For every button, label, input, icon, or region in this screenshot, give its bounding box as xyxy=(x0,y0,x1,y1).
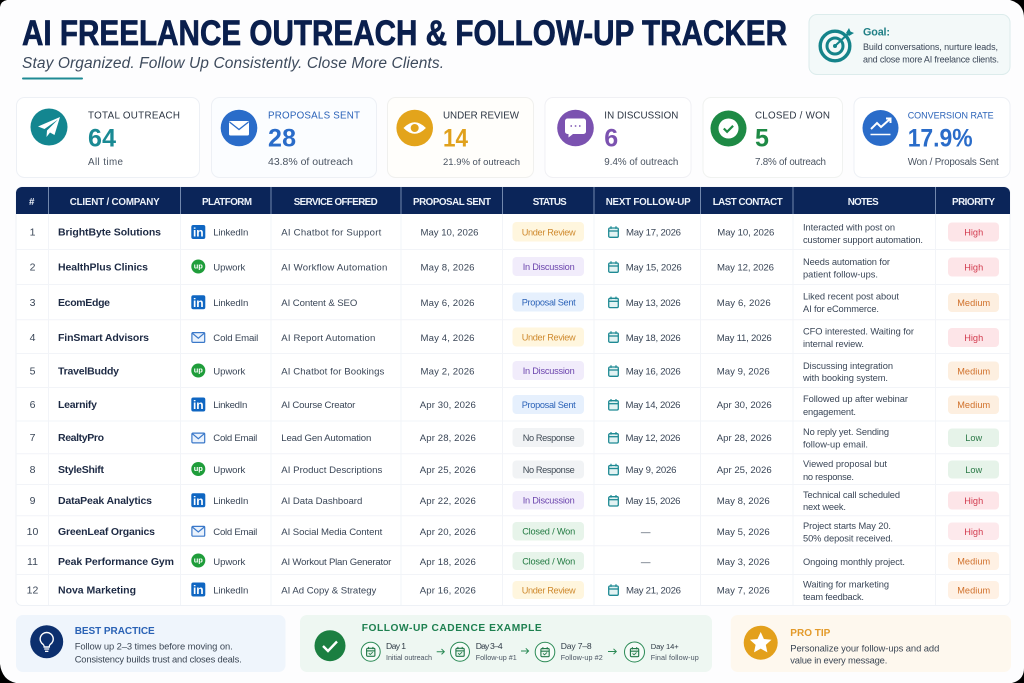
icon: star xyxy=(744,626,778,660)
KPI: closed won xyxy=(703,98,842,178)
note xyxy=(803,580,889,602)
icon: target xyxy=(820,28,854,61)
note: Waiting for marketing xyxy=(803,580,889,590)
note xyxy=(803,521,893,544)
note xyxy=(802,361,893,383)
icon: trend line xyxy=(862,110,898,146)
note: No reply yet. Sending xyxy=(803,427,889,437)
KPI: in discussion: IN DISCUSSION xyxy=(604,110,678,122)
row 10: AI Social Media Content xyxy=(281,527,383,538)
row 12: AI Ad Copy & Strategy xyxy=(281,586,377,596)
KPI: closed won: 7.8% of outreach xyxy=(755,157,826,168)
KPI: closed won: CLOSED / WON xyxy=(755,110,830,122)
row 5: AI Chatbot for Bookings xyxy=(281,366,385,378)
platform: LinkedIn xyxy=(191,295,248,310)
row 11: AI Workout Plan Generator xyxy=(281,557,392,568)
status: Under Review xyxy=(512,328,584,346)
priority: Medium xyxy=(948,581,999,599)
priority: High xyxy=(948,258,999,276)
platform: Upwork: up xyxy=(194,464,203,473)
priority: High xyxy=(948,222,999,242)
note: Project starts May 20. xyxy=(803,521,891,531)
subtitle: Stay Organized. Follow Up Consistently. Close More Clients. xyxy=(22,55,444,72)
priority: Medium xyxy=(948,293,999,312)
status: Closed / Won: Closed / Won xyxy=(522,526,575,536)
panel: pro tip xyxy=(731,615,1011,672)
row 2: 2 xyxy=(30,262,36,274)
row 12: May 7, 2026 xyxy=(717,586,770,596)
next follow-up xyxy=(609,464,676,476)
note: AI for eCommerce. xyxy=(803,304,879,314)
panel: best practice: Follow up 2–3 times before moving on. xyxy=(75,640,233,652)
KPI: under review: 21.9% of outreach xyxy=(443,157,520,168)
note: follow-up email. xyxy=(803,440,868,450)
priority: High: High xyxy=(964,527,983,537)
status: Closed / Won xyxy=(512,522,584,540)
row 9: May 8, 2026 xyxy=(717,496,770,507)
priority: High: High xyxy=(964,496,983,506)
row 4: AI Report Automation xyxy=(281,333,375,344)
platform: LinkedIn: in xyxy=(193,398,204,412)
table header xyxy=(16,187,1010,214)
step: day 7-8 xyxy=(535,641,603,662)
status: In Discussion: In Discussion xyxy=(523,496,575,506)
KPI: total outreach: 64 xyxy=(88,125,116,153)
row 11: 11 xyxy=(27,556,38,568)
row 7: 7 xyxy=(30,432,36,444)
panel: best practice xyxy=(16,615,286,672)
row 7: RealtyPro xyxy=(58,432,104,444)
note: customer support automation. xyxy=(803,235,923,245)
KPI: total outreach: TOTAL OUTREACH xyxy=(88,110,180,122)
priority: Low xyxy=(948,428,999,447)
platform: Upwork: up xyxy=(194,262,203,271)
status: In Discussion xyxy=(512,361,584,380)
priority: Medium xyxy=(948,396,999,414)
KPI: closed won: 5 xyxy=(755,125,769,153)
status: Proposal Sent xyxy=(512,292,584,312)
panel: best practice: Consistency builds trust and closes deals. xyxy=(75,654,242,664)
KPI: conversion rate: CONVERSION RATE xyxy=(908,110,994,120)
next follow-up: May 9, 2026 xyxy=(626,465,676,476)
priority: Low xyxy=(948,460,999,478)
row 11 xyxy=(27,552,999,570)
platform: LinkedIn: in xyxy=(193,296,204,310)
platform: Upwork: up xyxy=(194,556,203,565)
panel: follow-up cadence xyxy=(300,615,712,672)
table header: SERVICE OFFERED xyxy=(294,197,378,208)
table header: PLATFORM xyxy=(202,197,252,208)
platform: Cold Email: Cold Email xyxy=(213,527,257,538)
table header: LAST CONTACT xyxy=(713,197,783,208)
step: day 14+: Day 14+ xyxy=(651,642,679,651)
row 8 xyxy=(30,459,999,482)
next follow-up: May 13, 2026 xyxy=(626,298,681,309)
row 10: May 5, 2026 xyxy=(717,527,770,538)
priority: High: High xyxy=(964,227,983,237)
row 5: May 9, 2026 xyxy=(717,366,770,378)
row 8: Apr 25, 2026 xyxy=(420,465,476,476)
row 1: May 10, 2026 xyxy=(420,228,478,238)
platform: Cold Email: Cold Email xyxy=(213,433,257,444)
status: Proposal Sent xyxy=(512,395,584,414)
note: Viewed proposal but xyxy=(803,459,887,469)
step: day 3-4 xyxy=(450,641,517,662)
next follow-up xyxy=(609,432,680,444)
row 11: Apr 18, 2026 xyxy=(420,557,476,568)
icon: paper plane xyxy=(30,108,68,146)
row 5 xyxy=(30,361,999,383)
row 4: May 4, 2026 xyxy=(420,333,474,344)
panel: pro tip: Personalize your follow-ups and add xyxy=(790,642,939,654)
next follow-up: May 12, 2026 xyxy=(626,433,680,444)
priority: High: High xyxy=(964,262,983,272)
next follow-up xyxy=(609,226,681,238)
row 12 xyxy=(27,580,999,602)
row 8: StyleShift xyxy=(58,464,104,476)
platform: Cold Email: Cold Email xyxy=(213,333,258,344)
table header: CLIENT / COMPANY xyxy=(70,197,160,208)
arrow xyxy=(521,648,529,654)
note xyxy=(803,292,899,314)
arrow xyxy=(608,649,616,654)
row 1: 1 xyxy=(30,226,36,238)
table xyxy=(16,187,1010,606)
note: with booking system. xyxy=(802,373,888,383)
note xyxy=(803,222,923,245)
row 4: May 11, 2026 xyxy=(717,333,772,344)
row 7: Apr 28, 2026 xyxy=(717,433,772,444)
note xyxy=(803,490,900,512)
next follow-up xyxy=(609,297,681,309)
table header: STATUS xyxy=(533,197,567,208)
platform: Upwork: Upwork xyxy=(213,262,246,274)
row 7: Apr 28, 2026 xyxy=(420,433,476,444)
next follow-up: none: — xyxy=(641,527,651,538)
icon: chat bubble xyxy=(557,110,594,146)
row 7 xyxy=(30,427,999,450)
row 7: Lead Gen Automation xyxy=(281,433,371,444)
status: In Discussion xyxy=(512,257,584,276)
step: day 7-8: Day 7–8 xyxy=(561,641,592,651)
platform: Cold Email xyxy=(192,433,257,444)
platform: LinkedIn: LinkedIn xyxy=(213,586,248,596)
row 3: AI Content & SEO xyxy=(281,298,357,309)
row 3: May 6, 2026 xyxy=(420,298,474,309)
icon: envelope xyxy=(221,110,257,146)
row 6: Apr 30, 2026 xyxy=(420,400,476,411)
goal callout xyxy=(809,14,1010,74)
note: CFO interested. Waiting for xyxy=(803,326,914,336)
KPI: under review: UNDER REVIEW xyxy=(443,110,520,122)
status: Under Review xyxy=(512,581,584,599)
next follow-up: May 18, 2026 xyxy=(626,333,681,344)
step: day 1 xyxy=(361,641,432,662)
row 2 xyxy=(30,257,999,280)
row 5: May 2, 2026 xyxy=(420,366,474,378)
priority: Medium xyxy=(948,362,999,380)
note: patient follow-ups. xyxy=(803,270,878,280)
row 9: AI Data Dashboard xyxy=(281,496,362,507)
icon: eye xyxy=(396,110,433,146)
priority: Medium: Medium xyxy=(957,366,991,376)
note: Technical call scheduled xyxy=(803,490,900,500)
row 6: AI Course Creator xyxy=(281,400,356,411)
row 9: DataPeak Analytics xyxy=(58,495,152,507)
status: In Discussion: In Discussion xyxy=(523,366,575,376)
note: Followed up after webinar xyxy=(803,394,908,404)
panel: pro tip: value in every message. xyxy=(790,654,887,666)
priority: High xyxy=(948,328,999,347)
note: Liked recent post about xyxy=(803,292,899,302)
platform: LinkedIn: in xyxy=(193,494,204,508)
KPI: proposals sent: PROPOSALS SENT xyxy=(268,110,360,122)
KPI: proposals sent: 28 xyxy=(268,125,296,153)
priority: High xyxy=(948,492,999,510)
goal text xyxy=(863,42,999,64)
note: 50% deposit received. xyxy=(803,534,893,544)
row 5: TravelBuddy xyxy=(58,366,119,378)
platform: LinkedIn: LinkedIn xyxy=(213,228,248,238)
icon: light bulb xyxy=(30,625,63,658)
platform: LinkedIn xyxy=(191,582,248,597)
status: No Response: No Response xyxy=(523,465,575,475)
platform: Upwork xyxy=(191,260,246,274)
row 1: BrightByte Solutions xyxy=(58,226,161,238)
platform: LinkedIn xyxy=(191,493,248,508)
row 3: EcomEdge xyxy=(58,297,110,309)
row 2: HealthPlus Clinics xyxy=(58,262,148,274)
row 1: AI Chatbot for Support xyxy=(281,228,382,238)
goal text: Build conversations, nurture leads, xyxy=(863,42,998,52)
row 10: Apr 20, 2026 xyxy=(420,527,476,538)
row 2: AI Workflow Automation xyxy=(281,262,387,274)
priority: Low: Low xyxy=(965,465,983,475)
KPI: conversion rate: Won / Proposals Sent xyxy=(908,157,999,168)
next follow-up xyxy=(609,331,681,344)
next follow-up: May 17, 2026 xyxy=(626,228,681,238)
priority: High: High xyxy=(964,333,983,343)
row 6: 6 xyxy=(30,399,36,411)
priority: Medium: Medium xyxy=(957,586,991,596)
row 3: 3 xyxy=(30,297,36,309)
note: engagement. xyxy=(803,407,856,417)
row 8: Apr 25, 2026 xyxy=(717,465,772,476)
panel: best practice: BEST PRACTICE xyxy=(75,626,155,637)
status: No Response xyxy=(512,428,584,447)
step: day 3-4: Day 3–4 xyxy=(476,641,503,651)
platform: LinkedIn xyxy=(191,398,247,412)
priority: Medium xyxy=(948,552,999,570)
next follow-up: May 21, 2026 xyxy=(626,586,681,596)
row 9: 9 xyxy=(30,495,36,507)
row 10: 10 xyxy=(27,526,38,538)
title: AI FREELANCE OUTREACH & FOLLOW-UP TRACKER xyxy=(22,13,787,53)
KPI: under review xyxy=(388,98,534,178)
status: No Response xyxy=(512,460,584,478)
status: Closed / Won xyxy=(512,552,584,570)
priority: Low: Low xyxy=(965,433,983,443)
next follow-up xyxy=(609,365,681,378)
platform: Cold Email xyxy=(192,526,257,538)
platform: Cold Email xyxy=(192,333,258,344)
next follow-up xyxy=(609,584,681,596)
row 1 xyxy=(30,222,999,245)
status: Under Review xyxy=(512,222,584,242)
row 10: GreenLeaf Organics xyxy=(58,526,155,538)
KPI: total outreach xyxy=(16,98,200,178)
arrow xyxy=(437,649,444,654)
table header: PROPOSAL SENT xyxy=(413,197,491,208)
status: Under Review: Under Review xyxy=(522,585,576,595)
platform: LinkedIn: LinkedIn xyxy=(213,496,248,507)
platform: Upwork xyxy=(191,462,246,476)
panel: pro tip: PRO TIP xyxy=(790,628,831,639)
row 12: 12 xyxy=(27,584,38,596)
note: team feedback. xyxy=(803,592,864,602)
row 4 xyxy=(30,326,999,349)
note: Discussing integration xyxy=(803,361,893,371)
platform: LinkedIn: in xyxy=(193,226,204,240)
KPI: in discussion: 6 xyxy=(604,125,618,153)
priority: Medium: Medium xyxy=(957,298,991,308)
step: day 3-4: Follow-up #1 xyxy=(476,653,517,662)
priority: Medium: Medium xyxy=(957,400,991,410)
table header: NOTES xyxy=(848,197,879,208)
note xyxy=(803,427,889,450)
platform: LinkedIn: LinkedIn xyxy=(213,400,247,411)
status: In Discussion xyxy=(512,491,584,510)
KPI: total outreach: All time xyxy=(88,157,124,168)
row 9: Apr 22, 2026 xyxy=(420,496,476,507)
row 9 xyxy=(30,490,999,512)
step: day 14+: Final follow-up xyxy=(651,653,699,662)
KPI: proposals sent xyxy=(212,98,376,178)
next follow-up: none: — xyxy=(641,557,651,568)
platform: Upwork: up xyxy=(194,366,203,375)
KPI: conversion rate xyxy=(854,98,1010,178)
row 8: 8 xyxy=(30,464,36,476)
status: Proposal Sent: Proposal Sent xyxy=(522,297,576,307)
status: Under Review: Under Review xyxy=(522,332,576,342)
goal text: and close more AI freelance clients. xyxy=(863,54,999,64)
note xyxy=(803,394,908,417)
status: In Discussion: In Discussion xyxy=(523,262,575,272)
row 6 xyxy=(30,394,999,417)
KPI: in discussion: 9.4% of outreach xyxy=(604,157,678,168)
next follow-up xyxy=(609,261,682,274)
next follow-up xyxy=(609,495,680,507)
icon: check xyxy=(314,630,346,661)
row 2: May 8, 2026 xyxy=(420,262,474,274)
row 8: AI Product Descriptions xyxy=(281,465,383,476)
note: internal review. xyxy=(803,339,864,349)
platform: Upwork: Upwork xyxy=(213,366,246,378)
table header: # xyxy=(29,197,35,208)
KPI: conversion rate: 17.9% xyxy=(908,125,973,153)
step: day 14+ xyxy=(624,642,699,662)
panel: follow-up cadence: FOLLOW-UP CADENCE EXAMPLE xyxy=(362,623,542,634)
priority: High xyxy=(948,522,999,540)
platform: Upwork xyxy=(191,554,246,568)
platform: LinkedIn xyxy=(191,225,248,240)
row 12: Apr 16, 2026 xyxy=(420,586,476,596)
platform: Upwork xyxy=(191,364,246,378)
note xyxy=(803,326,914,349)
note: no response. xyxy=(803,472,854,482)
note: next week. xyxy=(803,502,846,512)
status: No Response: No Response xyxy=(523,433,575,443)
row 11: May 3, 2026 xyxy=(717,557,770,568)
row 3 xyxy=(30,292,999,314)
next follow-up: May 14, 2026 xyxy=(626,400,680,411)
note xyxy=(803,257,890,280)
note: Ongoing monthly project. xyxy=(803,557,905,567)
step: day 1: Day 1 xyxy=(386,641,406,651)
KPI: proposals sent: 43.8% of outreach xyxy=(268,156,353,168)
row 11: Peak Performance Gym xyxy=(58,556,174,568)
next follow-up xyxy=(609,399,680,411)
goal heading: Goal: xyxy=(863,26,890,38)
platform: Upwork: Upwork xyxy=(213,557,246,568)
row 6: Learnify xyxy=(58,399,97,411)
row 2: May 12, 2026 xyxy=(717,262,774,274)
row 6: Apr 30, 2026 xyxy=(717,400,772,411)
status: Under Review: Under Review xyxy=(522,227,576,237)
row 10 xyxy=(27,521,999,544)
row 1: May 10, 2026 xyxy=(717,228,774,238)
KPI: in discussion xyxy=(545,98,691,178)
next follow-up: May 15, 2026 xyxy=(626,262,682,274)
platform: LinkedIn: LinkedIn xyxy=(213,298,248,309)
table header: PRIORITY xyxy=(952,197,995,208)
step: day 1: Initial outreach xyxy=(386,653,432,662)
table header: NEXT FOLLOW-UP xyxy=(606,197,691,208)
platform: LinkedIn: in xyxy=(193,583,204,597)
note: Needs automation for xyxy=(803,257,890,267)
next follow-up: May 16, 2026 xyxy=(626,366,681,378)
priority: Medium: Medium xyxy=(957,556,991,566)
note: Interacted with post on xyxy=(803,222,895,232)
row 4: FinSmart Advisors xyxy=(58,332,149,344)
step: day 7-8: Follow-up #2 xyxy=(561,653,603,662)
row 4: 4 xyxy=(30,332,36,344)
icon: check circle xyxy=(710,110,746,146)
next follow-up: May 15, 2026 xyxy=(626,496,680,507)
row 3: May 6, 2026 xyxy=(717,298,771,309)
status: Proposal Sent: Proposal Sent xyxy=(522,400,576,410)
KPI: under review: 14 xyxy=(443,125,468,153)
row 12: Nova Marketing xyxy=(58,584,136,596)
note xyxy=(803,459,887,482)
row 5: 5 xyxy=(30,366,36,378)
status: Closed / Won: Closed / Won xyxy=(522,556,575,566)
platform: Upwork: Upwork xyxy=(213,465,246,476)
